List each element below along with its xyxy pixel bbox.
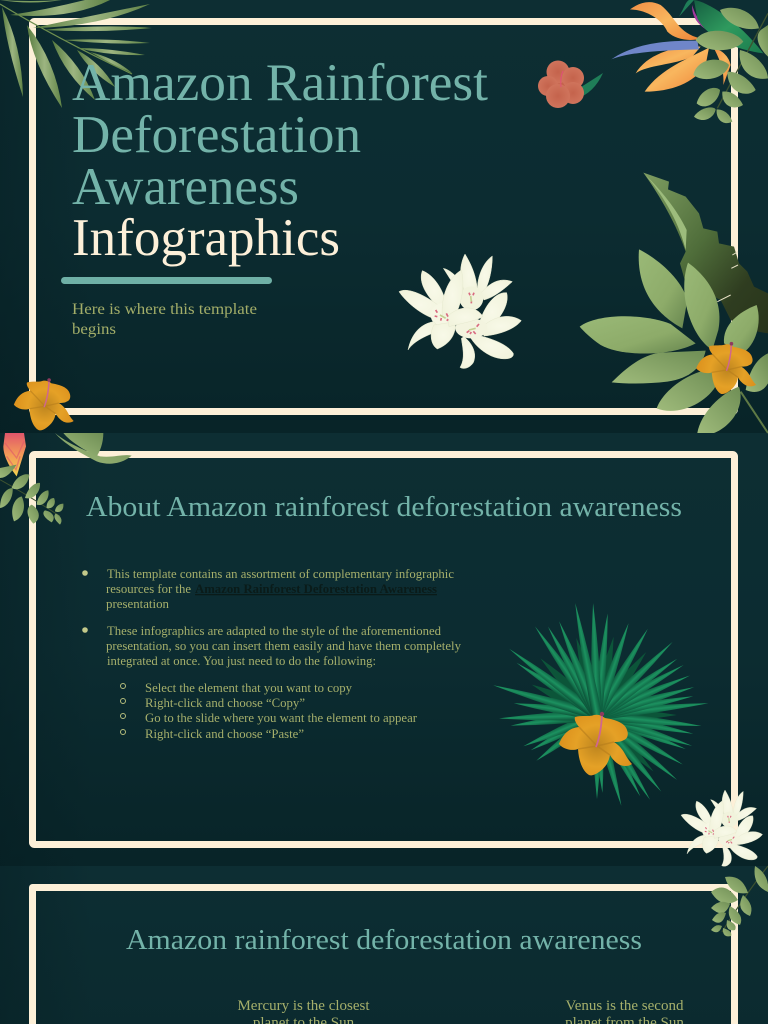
subtitle: Here is where this template xyxy=(72,301,257,318)
panel: title slide xyxy=(0,0,768,433)
icon: salmon flower xyxy=(538,60,603,108)
frame: about slide xyxy=(32,454,734,844)
text block: steps list: Right-click and choose “Paste” xyxy=(145,726,304,741)
text block: Venus xyxy=(565,998,684,1024)
subtitle: begins xyxy=(72,321,116,338)
text block: Mercury xyxy=(237,998,370,1024)
frame: title slide xyxy=(32,22,734,412)
text block: intro bullets: Amazon Rainforest Deforestation Awareness xyxy=(195,581,437,596)
title underline bar xyxy=(61,277,272,284)
text block: steps list: Go to the slide where you want the element to appear xyxy=(145,710,418,725)
title: Deforestation xyxy=(72,106,361,164)
text block: intro bullets: presentation, so you can insert them easily and have them completely xyxy=(106,638,461,653)
panel: third slide xyxy=(32,866,768,1024)
text block: Mercury: Mercury is the closest xyxy=(237,998,370,1014)
panel: about slide xyxy=(0,433,763,866)
text block: intro bullets: integrated at once. You just need to do the following: xyxy=(107,653,376,668)
subtitle xyxy=(72,301,257,338)
title: Amazon Rainforest xyxy=(72,54,488,112)
title xyxy=(72,54,488,267)
icon: green palm burst with hibiscus xyxy=(492,602,709,807)
text block: steps list xyxy=(120,680,418,741)
title: Awareness xyxy=(72,158,299,216)
icon: white lilies xyxy=(399,254,521,368)
icon: white lilies bottom right xyxy=(681,790,763,866)
icon: yellow hibiscus bottom left xyxy=(14,378,74,430)
text block: steps list: Right-click and choose “Copy” xyxy=(145,695,305,710)
text block: intro bullets: These infographics are adapted to the style of the aforementioned xyxy=(107,623,441,638)
icon: leaves top right xyxy=(711,866,768,936)
icon: palm frond top left xyxy=(0,0,152,108)
text block: steps list: Select the element that you want to copy xyxy=(145,680,352,695)
title: Infographics xyxy=(72,209,340,267)
heading: third slide: Amazon rainforest deforestation awareness xyxy=(126,924,642,956)
icon: tropical leaves with hibiscus bottom right xyxy=(580,173,768,433)
text block: intro bullets: resources for the xyxy=(106,581,191,596)
frame: third slide xyxy=(32,888,734,1024)
text block: intro bullets: presentation xyxy=(106,596,169,611)
heading: about: About Amazon rainforest deforestation awareness xyxy=(86,491,682,523)
text block: Venus: Venus is the second xyxy=(566,998,684,1014)
text block: intro bullets: This template contains an assortment of complementary infographic xyxy=(107,566,454,581)
icon: heliconia and leaves top left xyxy=(0,433,132,525)
icon: bird of paradise with leaves xyxy=(611,0,768,123)
text block: intro bullets xyxy=(82,566,461,668)
